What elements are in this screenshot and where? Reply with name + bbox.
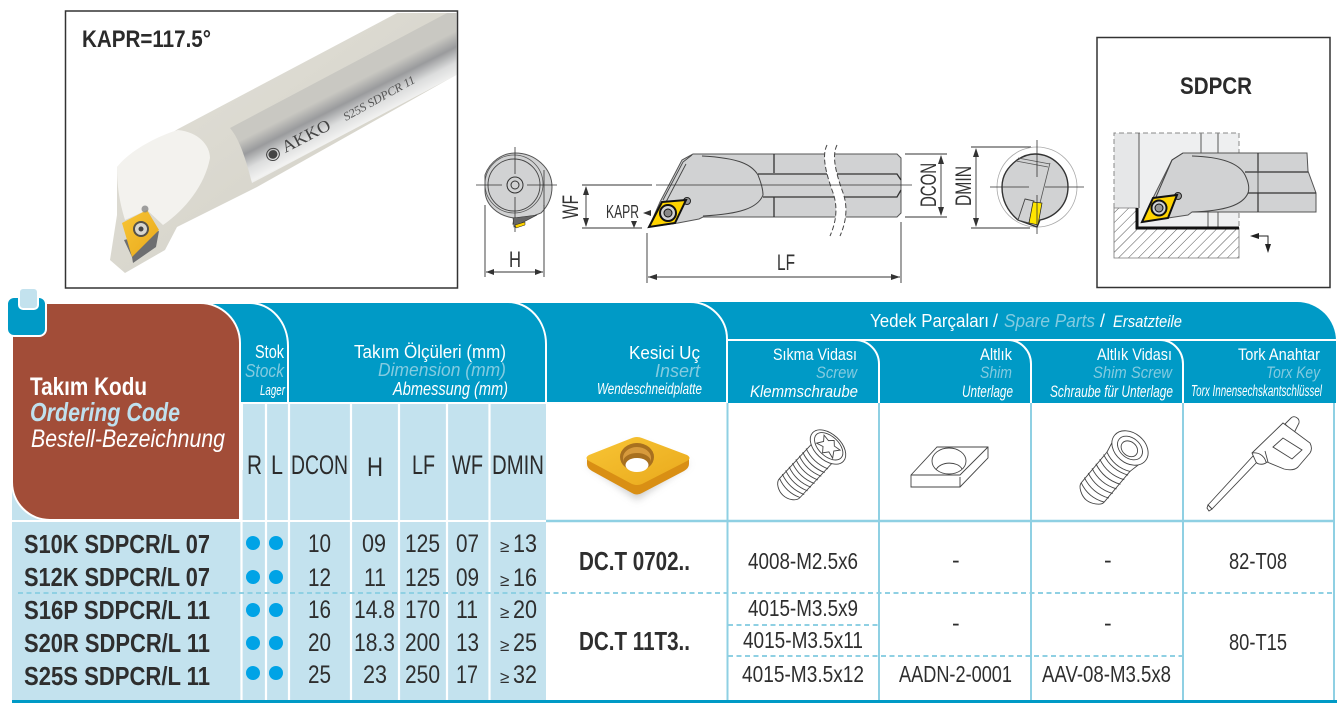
header: dimensions bbox=[250, 302, 546, 403]
column: dimension values: 23 bbox=[363, 661, 387, 689]
image: shim bbox=[911, 447, 988, 487]
column: ordering codes: S20R SDPCR/L 11 bbox=[24, 628, 210, 658]
column: dimension values: 18.3 bbox=[354, 629, 395, 657]
column: dimension values: ≥ bbox=[500, 668, 509, 687]
column: dimension values: 200 bbox=[405, 629, 440, 657]
header: dimensions: Takım Ölçüleri (mm) bbox=[354, 342, 506, 362]
column labels: LF bbox=[412, 450, 435, 480]
column: dimension values: ≥ bbox=[500, 636, 509, 655]
column: dimension values bbox=[308, 530, 537, 689]
column: spare part codes: 82-T08 bbox=[1229, 548, 1287, 574]
column: spare part codes: 80-T15 bbox=[1229, 629, 1287, 655]
column: dimension values: 10 bbox=[308, 530, 331, 558]
column: spare part codes: AADN-2-0001 bbox=[899, 661, 1012, 687]
header: spare parts: / bbox=[993, 311, 998, 331]
header: spare parts: Klemmschraube bbox=[750, 382, 858, 401]
column: dimension values: 250 bbox=[405, 661, 440, 689]
panel: SDPCR machining diagram bbox=[1097, 38, 1330, 288]
column: dimension values: 32 bbox=[513, 661, 537, 689]
column: dimension values: 20 bbox=[308, 629, 331, 657]
column: spare part codes: - bbox=[1104, 547, 1112, 573]
column: dimension values: ≥ bbox=[500, 571, 509, 590]
technical drawing: side view bbox=[649, 140, 912, 238]
column: ordering codes bbox=[24, 529, 210, 691]
column: dimension values: ≥ bbox=[500, 537, 509, 556]
column: ordering codes: S10K SDPCR/L 07 bbox=[24, 529, 210, 559]
column: spare part codes: AAV-08-M3.5x8 bbox=[1042, 661, 1171, 687]
column: dimension values: 16 bbox=[513, 564, 537, 592]
column: dimension values: 12 bbox=[308, 564, 331, 592]
column: dimension values: 13 bbox=[513, 530, 537, 558]
column: spare part codes: 4015-M3.5x12 bbox=[742, 661, 864, 687]
table grid lines bbox=[18, 403, 1335, 700]
header: ordering code: Ordering Code bbox=[30, 397, 180, 427]
column: dimension values: 25 bbox=[308, 661, 331, 689]
column: dimension values: 14.8 bbox=[354, 596, 395, 624]
column: spare part codes bbox=[742, 547, 1287, 687]
header: spare parts: Shim bbox=[980, 363, 1012, 382]
image: torx key bbox=[1207, 417, 1312, 511]
column: spare part codes: 4015-M3.5x9 bbox=[748, 595, 858, 621]
dimension: DCON: DCON bbox=[916, 163, 941, 207]
photo label: KAPR: KAPR=117.5° bbox=[82, 26, 211, 53]
photo: boring bar: S25S SDPCR 11 bbox=[341, 73, 417, 124]
column: dimension values: 17 bbox=[456, 661, 478, 689]
column: spare part codes: 4015-M3.5x11 bbox=[743, 627, 863, 653]
header: stock: Stock bbox=[245, 361, 285, 381]
header: stock: Lager bbox=[260, 382, 286, 399]
bottom rule bbox=[12, 700, 1337, 703]
image: insert bbox=[586, 437, 690, 500]
image: shim screw bbox=[1071, 424, 1155, 513]
column labels: WF bbox=[452, 450, 483, 480]
header: insert: Wendeschneidplatte bbox=[597, 381, 702, 398]
column: dimension values: 16 bbox=[308, 596, 331, 624]
column: spare part codes: - bbox=[952, 610, 960, 636]
column labels: DMIN bbox=[492, 450, 544, 480]
table bbox=[7, 288, 1337, 703]
column: dimension values: 07 bbox=[456, 530, 479, 558]
dimension: DMIN: DMIN bbox=[951, 166, 976, 206]
dimension: WF: WF bbox=[558, 195, 583, 219]
photo: boring bar: ◉ AKKO bbox=[261, 115, 334, 166]
dimension: WF bbox=[558, 185, 652, 228]
header: insert: Kesici Uç bbox=[629, 343, 700, 363]
column: dimension values: 25 bbox=[513, 629, 537, 657]
column labels: H bbox=[367, 452, 383, 482]
column: spare part codes: - bbox=[952, 547, 960, 573]
column: dimension values: 11 bbox=[456, 596, 478, 624]
header: insert: Insert bbox=[655, 361, 701, 381]
dimension: KAPR: KAPR bbox=[606, 202, 639, 222]
header: ordering code bbox=[12, 303, 240, 520]
header: spare parts: Altlık Vidası bbox=[1097, 345, 1172, 364]
column: dimension values: 09 bbox=[362, 530, 386, 558]
header: spare parts: Tork Anahtar bbox=[1238, 345, 1320, 364]
icon: tab marker bbox=[7, 288, 46, 336]
header: dimensions: Dimension (mm) bbox=[378, 360, 506, 380]
column: dimension values: 125 bbox=[405, 530, 440, 558]
diagram: workpiece and tool bbox=[1114, 133, 1316, 258]
dimension: DCON bbox=[905, 154, 947, 217]
column labels: R bbox=[247, 450, 262, 480]
header: stock bbox=[205, 303, 288, 403]
column: dimension values: 13 bbox=[456, 629, 479, 657]
column: insert codes: DC.T 0702.. bbox=[579, 546, 690, 576]
column: dimension values: 170 bbox=[405, 596, 440, 624]
column: dimension values: 20 bbox=[513, 596, 537, 624]
header: spare parts: Shim Screw bbox=[1093, 363, 1173, 382]
column: insert codes bbox=[579, 546, 690, 656]
header: stock: Stok bbox=[255, 342, 285, 362]
header: spare parts: Unterlage bbox=[962, 382, 1013, 401]
column: dimension values: 11 bbox=[364, 564, 386, 592]
dimension: LF bbox=[647, 222, 901, 283]
column: spare part codes: - bbox=[1104, 610, 1112, 636]
column: spare part codes: 4008-M2.5x6 bbox=[748, 548, 858, 574]
column: insert codes: DC.T 11T3.. bbox=[579, 626, 690, 656]
column: ordering codes: S25S SDPCR/L 11 bbox=[24, 661, 210, 691]
header: spare parts: Altlık bbox=[980, 345, 1012, 364]
dimension: LF: LF bbox=[777, 250, 795, 275]
dimension: DMIN bbox=[951, 147, 1031, 228]
table body backgrounds bbox=[12, 404, 546, 700]
technical drawing: end view left bbox=[476, 147, 557, 277]
arrows: feed direction bbox=[1250, 233, 1271, 253]
column: dimension values: ≥ bbox=[500, 603, 509, 622]
column labels: L bbox=[271, 450, 283, 480]
column: ordering codes: S16P SDPCR/L 11 bbox=[24, 595, 210, 625]
photo: boring bar bbox=[110, 13, 456, 273]
header: insert bbox=[500, 302, 727, 403]
column: dimension values: 09 bbox=[456, 564, 479, 592]
header: ordering code: Bestell-Bezeichnung bbox=[31, 425, 225, 453]
header: spare parts: Yedek Parçaları bbox=[870, 311, 989, 331]
header: spare parts: Screw bbox=[816, 363, 858, 382]
image: clamping screw bbox=[768, 423, 852, 510]
header: spare parts: Spare Parts bbox=[1004, 311, 1095, 331]
column: ordering codes: S12K SDPCR/L 07 bbox=[24, 562, 210, 592]
header: spare parts bbox=[690, 302, 1336, 403]
header: spare parts: Schraube für Unterlage bbox=[1050, 382, 1173, 401]
header: spare parts: Sıkma Vidası bbox=[773, 345, 857, 364]
panel: tool photo bbox=[66, 11, 458, 288]
column: dimension values: 125 bbox=[405, 564, 440, 592]
panel title: SDPCR bbox=[1180, 73, 1252, 100]
header: spare parts: Ersatzteile bbox=[1113, 312, 1182, 331]
header: spare parts: Torx Key bbox=[1266, 363, 1321, 382]
header: spare parts: / bbox=[1100, 311, 1105, 331]
header: dimensions: Abmessung (mm) bbox=[392, 379, 508, 399]
column labels bbox=[247, 450, 544, 482]
column labels: DCON bbox=[291, 450, 348, 480]
dimension label H: H bbox=[509, 247, 521, 272]
header: ordering code: Takım Kodu bbox=[30, 373, 147, 401]
technical drawing: end view right bbox=[990, 140, 1084, 234]
column: stock dots bbox=[246, 536, 283, 680]
